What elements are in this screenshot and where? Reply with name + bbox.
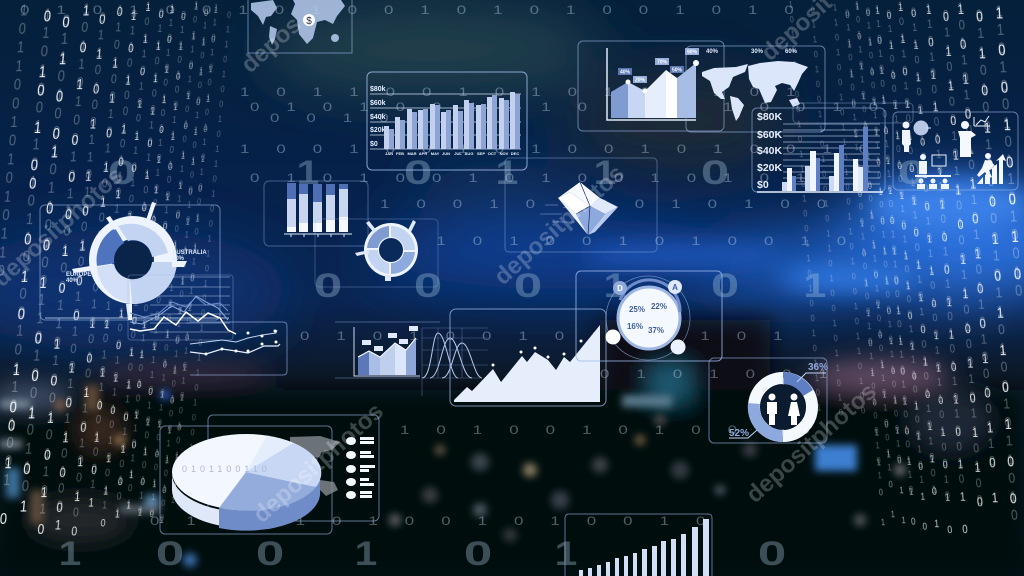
panel: monthly bar chart: JUL <box>454 151 462 156</box>
bright digits: 1 0 1 1 0 1 1 0 1 0 1 1 0 1 0 1 1 <box>123 4 177 515</box>
bright digits: 1 1 0 1 0 1 1 0 1 0 1 1 0 1 1 0 1 0 <box>147 2 201 524</box>
pie side <box>172 474 320 528</box>
bright digits <box>0 2 221 542</box>
binary rows: small faint digits: 0101001010010 <box>400 235 846 248</box>
faint digits: 0110100110100101101001011010010 <box>908 6 953 506</box>
value tags: 20% <box>635 78 646 84</box>
panel: monthly bar chart: MAY <box>431 151 440 156</box>
axis labels: $60K <box>757 129 783 141</box>
chart: large donut: AUSTRALIA <box>172 250 207 256</box>
binary rows: large faint digits: 0 <box>701 154 729 192</box>
bright digits <box>843 2 1024 540</box>
faint digits: 01101001011010011010010110100101 <box>843 8 884 486</box>
binary rows: large faint digits: 1 <box>604 266 626 304</box>
panel: monthly bar chart: $20k <box>370 127 386 134</box>
binary rows: small faint digits: 001010 <box>270 112 461 125</box>
panel: monthly bar chart: FEB <box>396 151 404 156</box>
bright digits: 1 1 0 1 1 0 1 0 1 1 0 1 0 1 1 0 1 <box>895 2 942 534</box>
faint digits on pie: 0101100110 <box>182 464 271 474</box>
node: D: D <box>617 284 623 293</box>
axis labels: $80K <box>757 111 783 123</box>
faint digits: 01101001101001011010010110100 <box>53 10 109 515</box>
axis labels: $0 <box>757 179 769 191</box>
icon: faceted polyhedron <box>558 182 618 235</box>
icon: map landmasses <box>251 0 345 45</box>
faint digits: 01101001101001011010010110100110100 <box>157 6 211 528</box>
bright digits: 0 1 1 0 1 1 0 1 1 0 1 0 1 1 0 <box>68 5 126 542</box>
panel: monthly bar chart: $0 <box>370 141 378 148</box>
binary rows: large faint digits: 1 <box>297 153 319 191</box>
watermarks <box>0 0 882 528</box>
bright digits: 1 1 0 1 1 0 1 0 1 1 0 1 0 1 1 0 <box>97 2 153 534</box>
chart: small line graph <box>190 322 287 375</box>
faint digits: 0110100110100101101001011010 <box>972 6 1022 525</box>
bright digits: 0 1 1 0 1 1 0 1 1 0 1 0 1 1 0 <box>940 10 986 513</box>
panel: monthly bar chart: NOV <box>500 151 509 156</box>
panel: small stacked bars <box>264 181 368 246</box>
bright digits: 1 0 1 0 1 1 0 1 0 0 1 0 1 0 1 <box>954 2 1002 508</box>
value tags <box>618 48 699 84</box>
panel: area chart top right <box>578 41 724 131</box>
donut segments <box>97 224 177 304</box>
panel: dollar bar chart <box>752 103 913 192</box>
percent labels: 22% <box>651 302 667 311</box>
bright digits: 1 0 1 1 0 1 1 0 1 0 1 1 0 1 0 1 1 0 <box>873 5 918 531</box>
bright digits: 0 1 1 0 1 1 0 1 0 1 1 0 1 0 1 1 0 1 <box>843 10 888 532</box>
area segments <box>611 60 699 118</box>
axis labels: $20K <box>757 162 783 174</box>
icon: two people with globe <box>902 120 931 152</box>
binary rows: large faint digits: 0 <box>898 154 926 192</box>
panel: monthly bar chart: $60k <box>370 100 386 107</box>
chart: large donut: 10% <box>172 256 185 262</box>
faint digits: 01101001011010011010010110 <box>18 12 74 496</box>
faint digits: 10110100110100101101001011010011 <box>853 0 894 478</box>
binary rows: small faint digits: 01010010100101 <box>300 330 783 343</box>
binary rows: large faint digits: 0 <box>758 535 786 573</box>
faint digits: 011010010110100110100101101001 <box>87 8 140 495</box>
bright digits: 0 1 1 1 0 1 0 1 1 0 1 1 0 1 0 1 <box>112 9 166 525</box>
faint digits: 0110100110100101101001011010010110 <box>135 9 188 520</box>
binary rows: large faint digits: 0 <box>156 535 184 573</box>
panel: monthly bar chart: JAN <box>385 151 393 156</box>
binary rows: large faint digits: 0 <box>314 267 342 305</box>
faint digits: 01101001101001011010010110100101 <box>884 8 927 489</box>
node: D <box>613 281 627 295</box>
faint digits: 0110100110100101101001011010 <box>808 5 846 423</box>
panel: world map with percentages: 60% <box>785 49 798 55</box>
faint digits: 01101001011010011010010110100101 <box>112 7 167 523</box>
watermarks: depos <box>236 11 307 78</box>
icon: presenter with chart <box>958 116 990 157</box>
bright digits: 0 1 0 1 1 0 1 0 1 1 0 1 0 1 1 0 1 0 <box>884 10 930 536</box>
chart: small donut <box>315 219 438 287</box>
legend dots <box>346 437 375 499</box>
shadow map behind pie <box>290 436 340 496</box>
bright digits: 1 0 1 1 0 1 1 0 0 1 1 0 1 0 1 <box>85 10 140 513</box>
faint digits: 1011010010110100110100101101001 <box>895 0 940 500</box>
binary rows: large faint digits: 1 <box>355 534 377 572</box>
binary rows: small faint digits: 1011001010100101 <box>240 86 795 99</box>
binary rows: large faint digits: 0 <box>404 154 432 192</box>
icon: man <box>767 394 777 425</box>
label: 52%: 52% <box>729 428 749 439</box>
binary rows: small faint digits: 010100101001010010 <box>250 101 878 114</box>
bright digits: 0 1 0 01 0 0 1 0 0 1 0 1 <box>16 14 74 517</box>
label: 36%: 36% <box>808 362 828 373</box>
bright digits: 1 0 1 1 0 1 0 1 1 0 1 0 1 1 0 1 0 <box>169 5 220 497</box>
panel: monthly bar chart: APR <box>419 151 427 156</box>
bars <box>782 127 868 191</box>
chart: large white area chart <box>450 309 606 406</box>
binary rows: large faint digits: 1 <box>59 534 81 572</box>
panel: monthly bar chart: MAR <box>407 151 417 156</box>
axis labels: $40K <box>757 145 783 157</box>
icon: world map <box>702 61 808 121</box>
binary rows: small faint digits: 100100101001010010 <box>240 143 868 156</box>
binary rows: large faint digits: 1 <box>804 266 826 304</box>
faint digits: 1011010010110100110100101101 <box>786 0 824 418</box>
faint digits: 1101001011010011010010110100 <box>831 3 868 421</box>
binary rows: large faint digits: 1 <box>555 534 577 572</box>
bright digits: 0 1 0 1 1 0 1 0 1 1 0 1 0 1 1 0 1 1 <box>864 8 908 530</box>
chart: gender donut <box>709 358 828 443</box>
panel: world map with percentages <box>686 46 825 132</box>
binary rows: large faint digits <box>59 153 926 573</box>
icon: woman <box>788 394 800 425</box>
binary rows: small faint digits: 1001010010100 <box>380 198 826 211</box>
chart: large donut: 40% <box>66 278 79 284</box>
binary rows: small faint digits: 0100101001010010 <box>150 515 705 528</box>
chart: line graph with grid <box>128 275 236 340</box>
bright digits: 1 0 1 1 0 1 1 0 0 1 1 0 1 0 1 1 0 <box>923 4 971 540</box>
bright digits: 1 0 1 0 0 0 1 0 1 0 1 0 1 0 <box>33 2 94 539</box>
percent labels: 37% <box>648 326 664 335</box>
panel: world map with percentages: 30% <box>751 49 764 55</box>
chart: small area with tags <box>335 322 440 378</box>
binary rows: large faint digits: 0 <box>256 535 284 573</box>
bright digits: 1 0 1 1 0 1 0 1 1 0 1 0 1 1 0 1 0 1 <box>853 2 897 524</box>
panel: monthly bar chart: JUN <box>442 151 450 156</box>
binary rows: large faint digits: 1 <box>594 153 616 191</box>
panel: monthly bar chart <box>367 72 527 170</box>
chart: percent circle <box>576 271 722 361</box>
faint digits: 101101001011010011010010110 <box>954 0 999 471</box>
panel: monthly bar chart: DEC <box>511 151 519 156</box>
faint digits: 1011010010110100110100101101 <box>35 0 94 519</box>
bars <box>384 92 520 149</box>
percent labels: 16% <box>627 322 643 331</box>
faint digits: 110100101101001101001011010010110 <box>873 3 916 499</box>
pie top <box>172 434 320 510</box>
chart: large donut: EUROPE <box>66 272 91 278</box>
watermarks: depositphotos <box>489 160 630 290</box>
bright digits: 0 1 1 1 0 1 0 1 1 0 1 1 0 1 0 1 0 <box>909 8 955 540</box>
binary rows: small faint digits <box>20 4 878 528</box>
binary rows: large faint digits: 0 <box>414 267 442 305</box>
bars <box>287 183 348 232</box>
faint digits: 1101001011010010110100110100101101 <box>168 3 221 510</box>
panel: monthly bar chart: $80k <box>370 86 386 93</box>
chart: large donut <box>40 202 229 320</box>
percent labels: 25% <box>629 305 645 314</box>
panel: monthly bar chart: SEP <box>477 151 485 156</box>
panel: top world map <box>248 0 352 53</box>
axis labels <box>757 111 783 191</box>
bright digits: 0 1 0 1 1 0 1 0 1 1 0 1 0 1 1 0 1 <box>135 11 188 522</box>
bright digits: 0 1 1 0 1 1 0 1 0 1 1 0 1 0 1 1 0 1 <box>157 8 210 530</box>
icon: classroom <box>915 154 951 189</box>
binary rows: small faint digits: 0101001 <box>600 368 828 381</box>
panel: monthly bar chart: AUG <box>465 151 473 156</box>
panel: monthly bar chart: $40k <box>370 114 386 121</box>
chart: bell curves <box>422 328 488 396</box>
binary rain: left curtain <box>0 0 234 542</box>
node: A: A <box>672 283 678 292</box>
faint digits: 10110100101101001101001011010010110 <box>147 0 201 522</box>
faint digits <box>0 0 234 528</box>
panel: monthly bar chart: OCT <box>488 151 497 156</box>
panel: 3D diamond <box>505 158 657 252</box>
binary rows: small faint digits: 101001010010 <box>400 424 810 437</box>
value tags: 40% <box>620 70 631 76</box>
binary rows: large faint digits: 0 <box>514 267 542 305</box>
binary rows: large faint digits: 0 <box>711 267 739 305</box>
value tags: 70% <box>657 60 668 66</box>
binary rain: right curtain <box>786 0 1024 540</box>
bright digits: 0 1 0 1 1 0 1 0 0 1 0 1 0 01 <box>51 12 109 535</box>
faint digits: 10110100110100101101001011010011 <box>99 0 154 516</box>
faint digits: 11010011010110100101101001 <box>0 6 55 490</box>
panel: world map with percentages: 40% <box>706 49 719 55</box>
faint digits <box>786 0 1024 525</box>
watermarks: depositphotos <box>248 398 389 528</box>
faint digits: 01101001011010011010010110100 <box>940 8 986 511</box>
panel: people icons <box>893 112 1018 190</box>
value tags: 90% <box>687 50 698 56</box>
binary rows: small faint digits: 0101001010010101 <box>250 172 805 185</box>
chart: bottom rising bars <box>565 514 712 576</box>
panel: top world map: $ <box>306 16 312 27</box>
binary rows: large faint digits: 1 <box>496 153 518 191</box>
value tags: 50% <box>672 68 683 74</box>
watermarks: depositphotos <box>741 378 882 508</box>
chart: 3D pie <box>160 415 379 534</box>
binary rows: large faint digits: 0 <box>108 154 136 192</box>
icon: runner with growth bars <box>977 153 1006 184</box>
faint digits: 110100101101001101001011010010 <box>923 2 967 489</box>
faint digits: 0110100101101001101001011010010 <box>864 6 904 469</box>
node: A <box>668 280 682 294</box>
faint digits: 1101001011010010110100110100101101 <box>124 2 177 513</box>
percent labels <box>627 302 667 335</box>
faint digits: 110100101101001101001011010010 <box>69 3 126 523</box>
faint digits: 0110100101101001101001011010010 <box>185 10 233 472</box>
binary rows: small faint digits: 0101001010010101001010 <box>20 4 794 17</box>
bright digits: 0 1 0 1 0 0 1 0 1 1 0 1 0 0 <box>972 8 1021 509</box>
binary rows: large faint digits: 0 <box>464 535 492 573</box>
